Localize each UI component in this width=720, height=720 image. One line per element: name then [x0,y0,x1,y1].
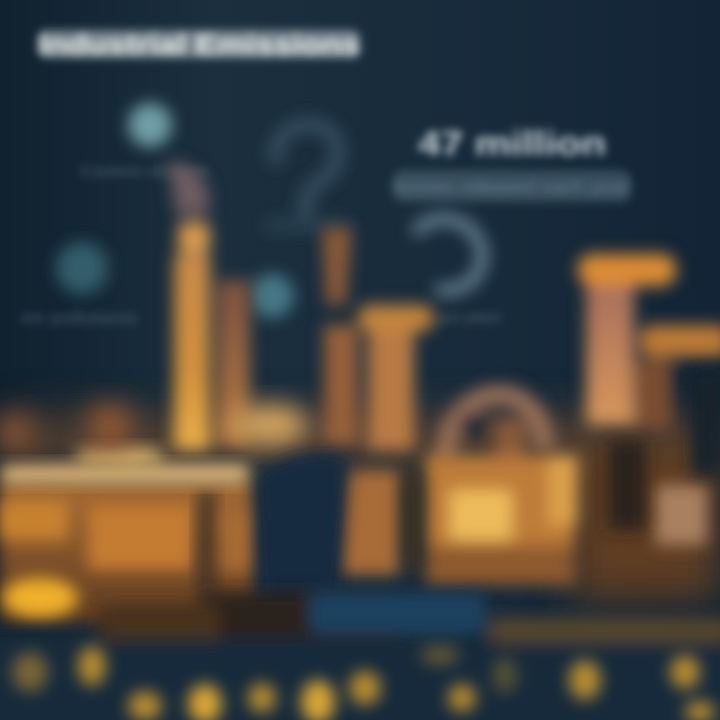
icon: smoke swirl right: per plant [438,309,500,325]
foreground yellow lights [12,645,715,720]
small distant stacks [0,405,130,450]
statistic [392,125,632,202]
icon: left circle with caption [20,242,138,327]
statistic: tonnes released each year [396,179,629,196]
chimney: tall centre left [168,160,250,450]
icon: centre circle [250,274,294,318]
arch structure [446,395,545,470]
skyline: distant glow [0,415,720,600]
dark central tank [255,453,350,600]
chimney: small centre [322,228,352,305]
icon: left circle with caption: Air pollutants [20,310,138,327]
chimney: right tall [578,254,720,430]
icon: smoke swirl centre [270,124,345,225]
icon: emissions cloud with caption: Carbon dioxide [80,163,210,179]
dark gaps in right buildings [405,370,720,570]
icon: smoke swirl right [418,219,500,325]
chimney: capped middle [324,305,434,450]
title: Industrial Emissions [38,29,360,60]
icon: emissions cloud with caption [80,103,210,179]
plant body: central lit buildings [340,455,707,585]
factory hall left [0,405,308,625]
statistic: 47 million [418,125,606,163]
lower ground [0,592,720,720]
